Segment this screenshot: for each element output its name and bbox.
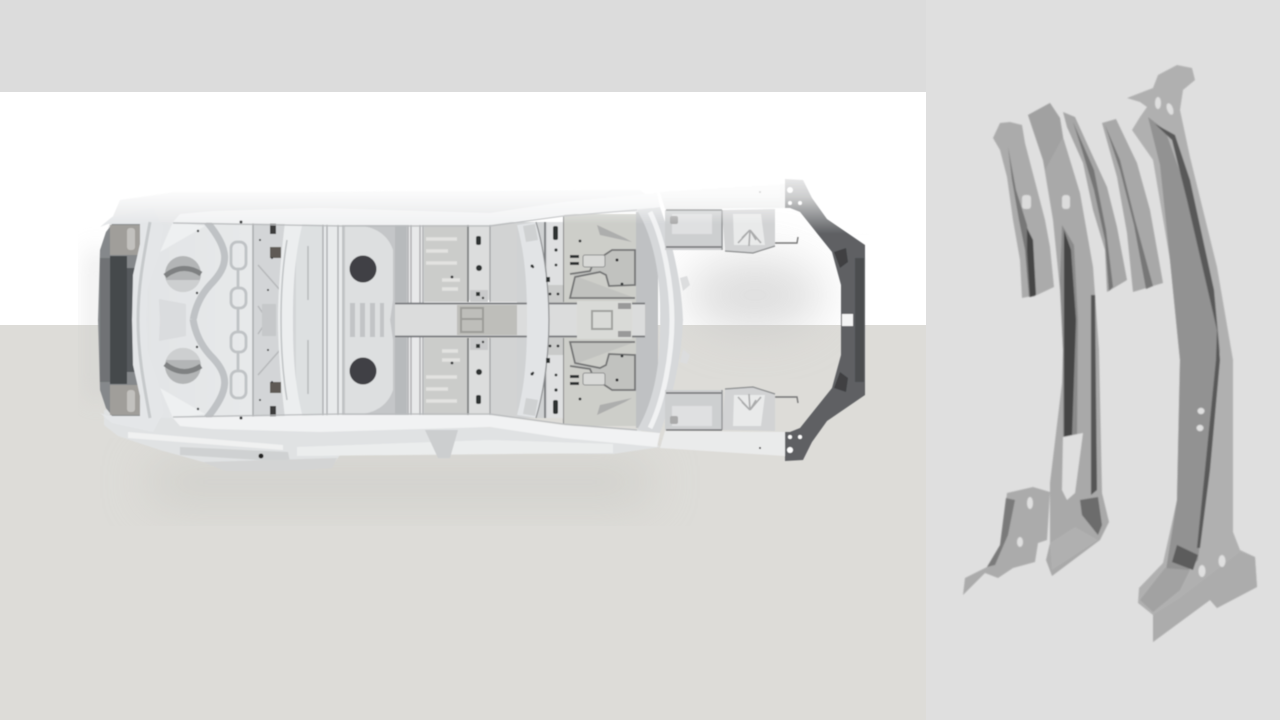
part: long reinforcement pillar xyxy=(1028,103,1109,576)
top rail xyxy=(173,193,660,225)
mid cross arch xyxy=(517,222,549,321)
rear cross arc xyxy=(100,208,163,321)
background: right panel xyxy=(926,0,1280,720)
rear bumper well xyxy=(98,224,143,321)
central tunnel xyxy=(395,304,645,321)
lower side sill and wheel arch xyxy=(104,410,660,471)
rear shelf panel xyxy=(140,222,253,321)
front cross arch xyxy=(637,207,683,321)
floor pan three xyxy=(564,214,636,304)
front bolt-on lug xyxy=(680,276,690,291)
detached pillar parts xyxy=(963,65,1257,642)
mirrored lower half of floor structure xyxy=(98,319,865,461)
background: top band xyxy=(0,0,926,92)
engine bay inner rail xyxy=(665,210,723,250)
shelf speaker hole xyxy=(165,256,201,292)
radiator support xyxy=(785,179,865,321)
background: lower floor xyxy=(0,325,926,720)
fade over the top of the car xyxy=(90,178,780,224)
rear cross arch xyxy=(278,222,303,321)
trunk floor section xyxy=(253,222,323,321)
strut tower xyxy=(722,209,775,253)
background: white band xyxy=(0,92,926,325)
part: narrow upper rail left xyxy=(1063,112,1127,292)
part: floor bracket xyxy=(963,487,1050,595)
upper side sill, faded xyxy=(108,190,660,228)
vertical beam one xyxy=(323,222,343,321)
part: narrow upper rail right xyxy=(1102,119,1163,292)
part: tall outer pillar xyxy=(1127,65,1257,642)
panel fastener dots xyxy=(196,191,761,299)
upper half of floor structure xyxy=(98,179,865,321)
part: short inner pillar xyxy=(993,122,1054,298)
front side rail xyxy=(660,184,785,209)
shelf chain rib xyxy=(231,242,246,321)
car body underbody structure xyxy=(90,172,870,471)
floor pan one xyxy=(424,224,468,302)
spare tyre well xyxy=(343,222,407,321)
vertical beam two xyxy=(407,222,424,321)
floor pan two xyxy=(490,222,518,302)
soft shadows around car body xyxy=(88,250,825,502)
